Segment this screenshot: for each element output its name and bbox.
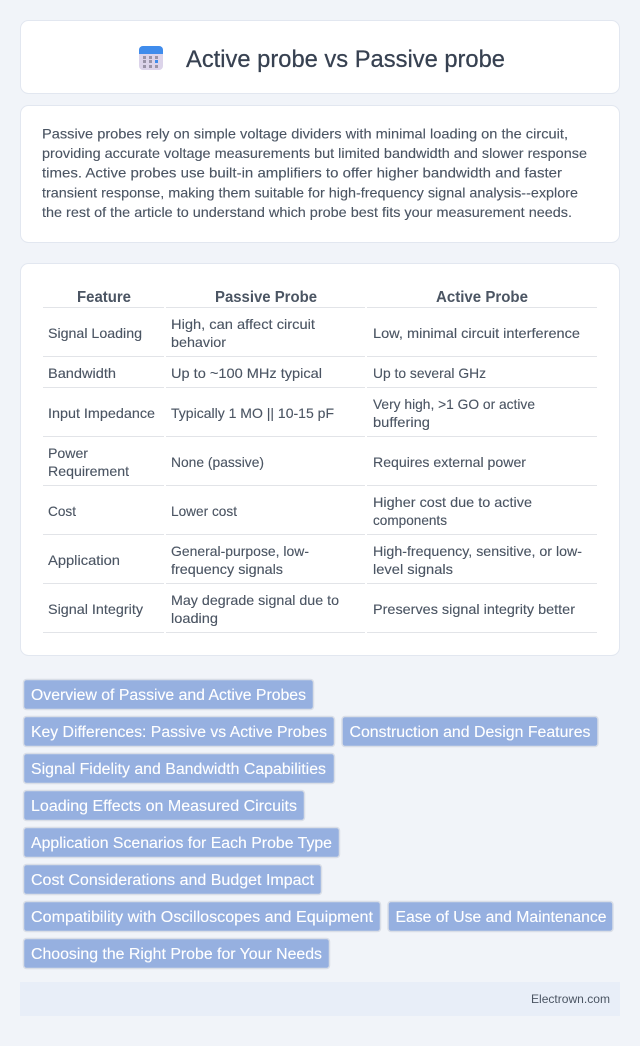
tag: Loading Effects on Measured Circuits: [31, 798, 297, 815]
row: application: General-purpose, low-: [171, 543, 309, 559]
intro text: providing accurate voltage measurements but limited bandwidth and slower response: [42, 145, 587, 161]
row: application: level signals: [373, 561, 453, 577]
row: application: High-frequency, sensitive, or low-: [373, 543, 582, 559]
tag: Construction and Design Features: [350, 724, 591, 741]
tag: [24, 864, 322, 894]
table header: Feature: [77, 289, 131, 306]
footer: [20, 982, 620, 1016]
tag: Signal Fidelity and Bandwidth Capabilities: [31, 761, 326, 778]
tag: [24, 680, 314, 710]
tag: Choosing the Right Probe for Your Needs: [31, 946, 322, 963]
row: bandwidth: Bandwidth: [48, 365, 116, 381]
panel: intro: [20, 106, 620, 242]
row: signal integrity: May degrade signal due to: [171, 592, 339, 608]
tag: Overview of Passive and Active Probes: [31, 687, 306, 704]
row: input impedance: Typically 1 MO || 10-15 pF: [171, 405, 334, 421]
footer: Electrown.com: [531, 992, 610, 1006]
intro text: transient response, making them suitable for high-frequency signal analysis--explore: [42, 184, 578, 200]
row: power requirement: Requires external power: [373, 454, 526, 470]
row: signal integrity: loading: [171, 610, 218, 626]
row: bandwidth: Up to ~100 MHz typical: [171, 365, 322, 381]
row: signal loading: Low, minimal circuit interference: [373, 325, 580, 341]
tag: Compatibility with Oscilloscopes and Equipment: [31, 909, 374, 926]
row: signal loading: Signal Loading: [48, 325, 142, 341]
row: application: [48, 543, 582, 577]
tag: Key Differences: Passive vs Active Probes: [31, 724, 327, 741]
row: power requirement: Power: [48, 445, 88, 461]
intro text: Passive probes rely on simple voltage dividers with minimal loading on the circuit,: [42, 126, 568, 142]
row: signal loading: [48, 316, 580, 350]
row: cost: Higher cost due to active: [373, 494, 532, 510]
table header: Active Probe: [436, 289, 528, 306]
row: cost: [48, 494, 532, 528]
row: bandwidth: [48, 365, 486, 381]
row: signal integrity: Signal Integrity: [48, 601, 143, 617]
row: input impedance: buffering: [373, 414, 430, 430]
intro text: [42, 126, 587, 220]
table header: Passive Probe: [215, 289, 317, 306]
tags: article topics: [24, 680, 613, 968]
tag: [24, 938, 330, 968]
row: signal integrity: Preserves signal integrity better: [373, 601, 575, 617]
row: power requirement: None (passive): [171, 454, 264, 470]
intro text: the rest of the article to understand which probe best fits your measurement needs.: [42, 204, 572, 220]
panel: header: [20, 20, 620, 94]
intro text: times. Active probes use built-in amplifiers to offer higher bandwidth and faster: [42, 165, 562, 181]
tag: [24, 828, 340, 858]
row: input impedance: [48, 396, 535, 430]
row: cost: Lower cost: [171, 503, 237, 519]
row: power requirement: [48, 445, 526, 479]
row: signal loading: behavior: [171, 334, 226, 350]
row: cost: Cost: [48, 503, 76, 519]
row: cost: components: [373, 512, 447, 528]
row: application: Application: [48, 552, 120, 568]
icon: calendar: [139, 46, 163, 70]
row: bandwidth: Up to several GHz: [373, 365, 486, 381]
row: application: frequency signals: [171, 561, 283, 577]
row: signal integrity: [48, 592, 575, 626]
table header: [77, 289, 528, 306]
tag: [388, 902, 613, 932]
tag: Ease of Use and Maintenance: [396, 909, 606, 926]
row: input impedance: Input Impedance: [48, 405, 155, 421]
row: input impedance: Very high, >1 GO or active: [373, 396, 535, 412]
tag: [24, 754, 334, 784]
tag: Cost Considerations and Budget Impact: [31, 872, 315, 889]
tag: [342, 716, 598, 746]
panel: comparison table: [20, 264, 620, 656]
tag: [24, 902, 380, 932]
row: signal loading: High, can affect circuit: [171, 316, 315, 332]
tag: Application Scenarios for Each Probe Type: [31, 835, 332, 852]
tag: [24, 790, 304, 820]
row: power requirement: Requirement: [48, 463, 129, 479]
title: Active probe vs Passive probe: [186, 46, 505, 73]
tag: [24, 716, 334, 746]
